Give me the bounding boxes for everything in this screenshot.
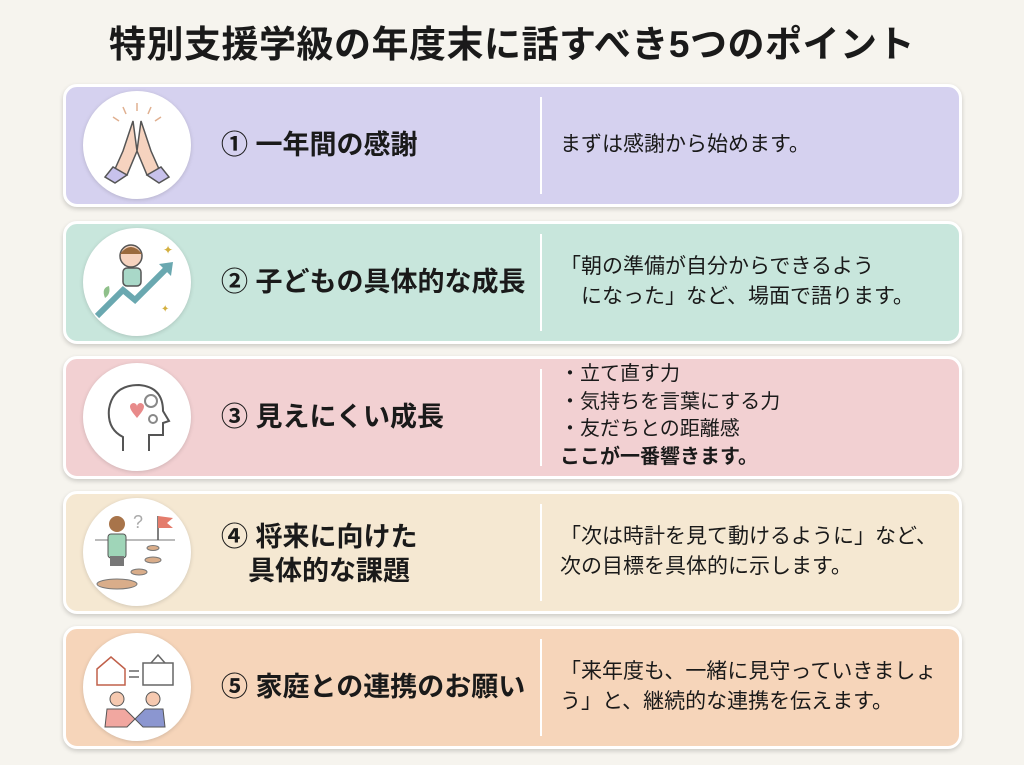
panel: 5 home cooperation xyxy=(63,626,962,749)
icon: child on arrow xyxy=(83,228,191,336)
text 3: ・立て直す力 xyxy=(560,363,680,385)
text 2: 「朝の準備が自分からできるよう xyxy=(560,255,874,278)
icon: child on arrow: ✦ xyxy=(163,243,173,257)
text 3 xyxy=(560,363,780,468)
text 5: う」と、継続的な連携を伝えます。 xyxy=(560,690,893,713)
text 4: 「次は時計を見て動けるように」など、 xyxy=(560,525,937,548)
panel: 2 growth xyxy=(63,221,962,344)
heading 2: ② 子どもの具体的な成長 xyxy=(221,267,526,297)
text 2 xyxy=(560,255,914,308)
icon: child with flag xyxy=(83,498,191,606)
icon: child with flag: ? xyxy=(133,512,143,532)
text 1: まずは感謝から始めます。 xyxy=(560,133,810,156)
heading 4 xyxy=(221,522,418,586)
text 5 xyxy=(560,660,936,713)
heading 1: ① 一年間の感謝 xyxy=(221,130,418,160)
heading 4: ④ 将来に向けた xyxy=(221,522,418,552)
title: 特別支援学級の年度末に話すべき5つのポイント xyxy=(109,24,915,65)
panel: 1 thanks xyxy=(63,84,962,207)
text 3: ここが一番響きます。 xyxy=(560,446,758,468)
panel: 3 invisible growth xyxy=(63,356,962,479)
text 3: ・友だちとの距離感 xyxy=(560,418,740,440)
heading 3: ③ 見えにくい成長 xyxy=(221,402,444,432)
icon: praying hands xyxy=(83,91,191,199)
panel: 4 future xyxy=(63,491,962,614)
text 2: になった」など、場面で語ります。 xyxy=(581,285,914,308)
icon: head with heart xyxy=(83,363,191,471)
icon: child on arrow: ✦ xyxy=(161,304,169,315)
text 3: ・気持ちを言葉にする力 xyxy=(560,390,780,412)
heading 4: 具体的な課題 xyxy=(248,556,410,586)
heading 5: ⑤ 家庭との連携のお願い xyxy=(221,672,525,702)
text 4: 次の目標を具体的に示します。 xyxy=(560,555,852,578)
text 5: 「来年度も、一緒に見守っていきましょ xyxy=(560,660,936,683)
text 4 xyxy=(560,525,937,578)
icon: home-school handshake xyxy=(83,633,191,741)
